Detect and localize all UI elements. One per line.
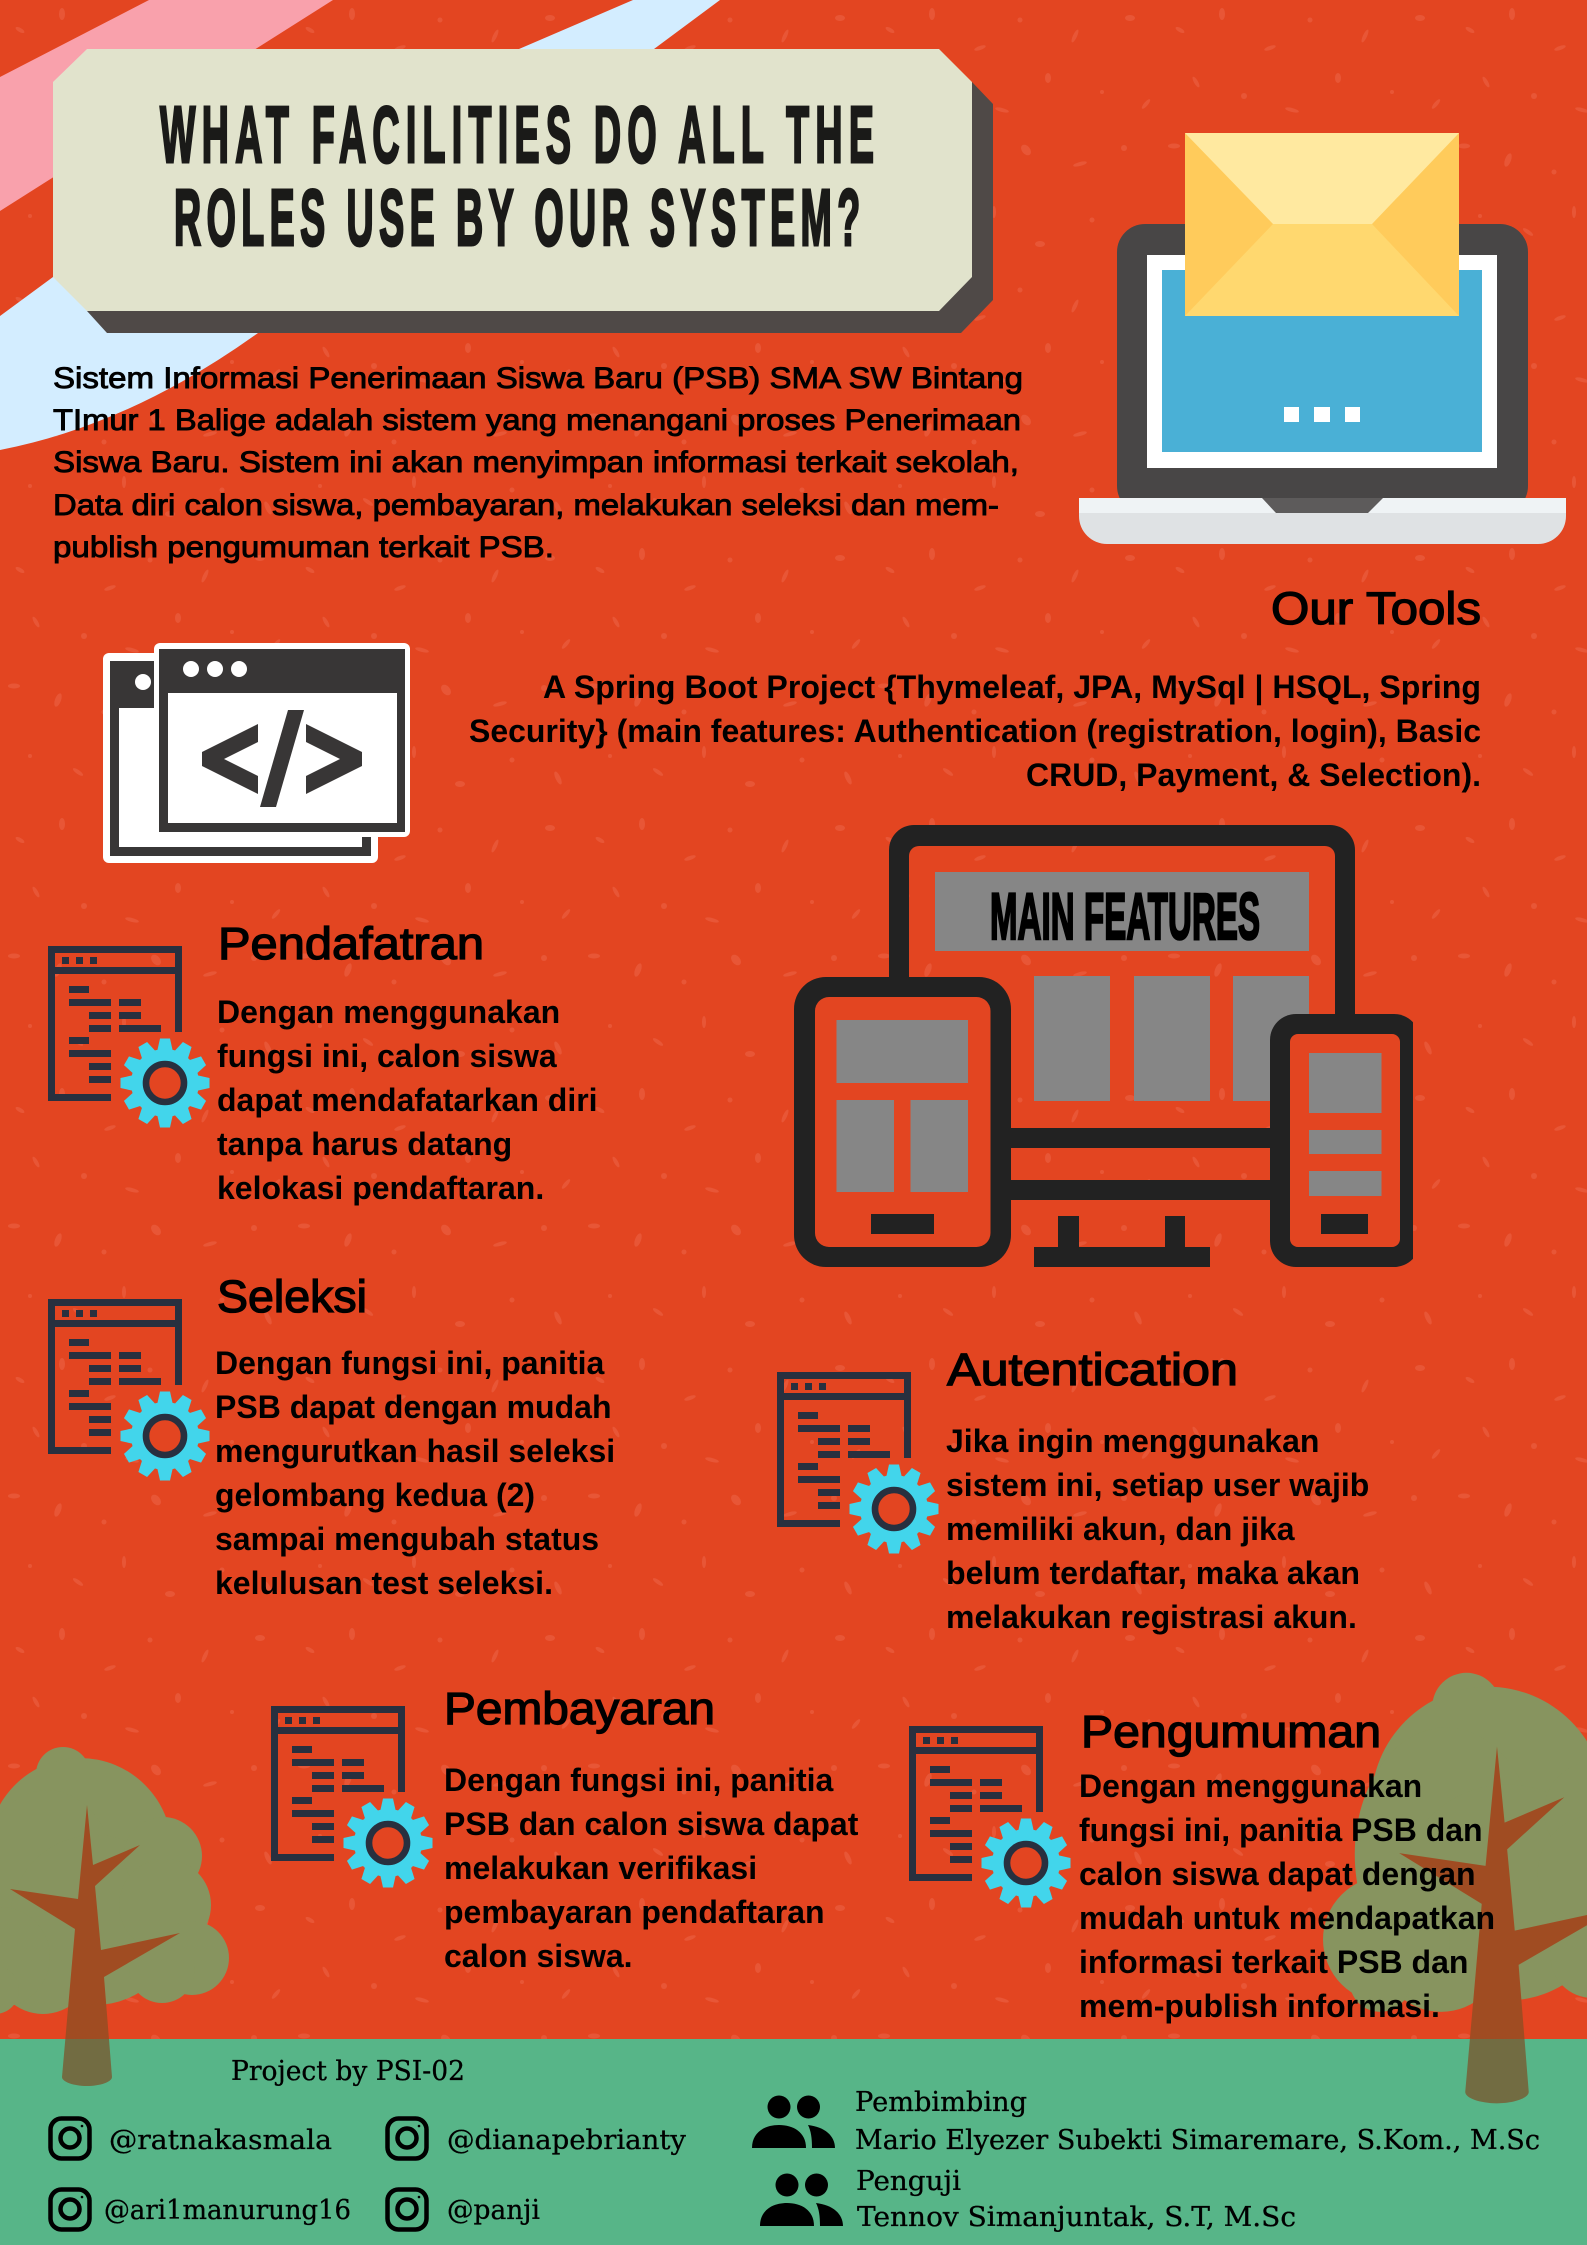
body: tanpa harus datang (217, 1126, 512, 1162)
body: kelulusan test seleksi. (215, 1565, 553, 1601)
name (855, 2087, 1540, 2156)
title text: WHAT FACILITIES DO ALL THE (160, 90, 874, 180)
body: fungsi ini, calon siswa (217, 1038, 557, 1074)
body: memiliki akun, dan jika (946, 1511, 1295, 1547)
intro paragraph: Data diri calon siswa, pembayaran, melakukan seleksi dan mem- (53, 489, 999, 522)
icon: main features devices (794, 825, 1420, 1267)
body (217, 994, 598, 1206)
body: sampai mengubah status (215, 1521, 599, 1557)
icon: code gear (48, 1299, 210, 1480)
body: informasi terkait PSB dan (1079, 1944, 1468, 1980)
feature: pembayaran (271, 1683, 859, 1974)
body: sistem ini, setiap user wajib (946, 1467, 1369, 1503)
body: Dengan menggunakan (1079, 1768, 1422, 1804)
monitor (889, 825, 1355, 1267)
penguji credit (760, 2166, 1296, 2233)
icon: laptop with envelope (1079, 133, 1566, 544)
tools paragraph: A Spring Boot Project {Thymeleaf, JPA, MySql | HSQL, Spring (543, 669, 1481, 705)
body: gelombang kedua (2) (215, 1477, 535, 1513)
icon: code gear (777, 1372, 938, 1554)
intro paragraph: publish pengumuman terkait PSB. (53, 531, 554, 564)
intro paragraph: Siswa Baru. Sistem ini akan menyimpan informasi terkait sekolah, (53, 446, 1019, 479)
intro paragraph: Sistem Informasi Penerimaan Siswa Baru (PSB) SMA SW Bintang (53, 362, 1023, 395)
body: belum terdaftar, maka akan (946, 1555, 1360, 1591)
instagram: ratnakasmala (50, 2118, 332, 2158)
icon: code windows (103, 643, 410, 863)
name (856, 2166, 1296, 2233)
body: fungsi ini, panitia PSB dan (1079, 1812, 1483, 1848)
icon: people (752, 2096, 835, 2148)
body: calon siswa dapat dengan (1079, 1856, 1476, 1892)
feature: seleksi (48, 1271, 615, 1601)
body: pembayaran pendaftaran (444, 1894, 825, 1930)
title plate (53, 49, 993, 333)
body: kelokasi pendaftaran. (217, 1170, 544, 1206)
tools paragraph (469, 669, 1481, 793)
instagram: dianapebrianty: @dianapebrianty (447, 2125, 687, 2156)
body: Dengan menggunakan (217, 994, 560, 1030)
body: PSB dan calon siswa dapat (444, 1806, 859, 1842)
body: Dengan fungsi ini, panitia (215, 1345, 605, 1381)
tree: right (1323, 1673, 1587, 2103)
heading: Pendafatran (218, 918, 484, 969)
instagram: dianapebrianty (388, 2118, 687, 2158)
body: PSB dapat dengan mudah (215, 1389, 611, 1425)
project credit: Project by PSI-02 (231, 2056, 465, 2087)
heading: Autentication (947, 1344, 1238, 1395)
name: Pembimbing (855, 2087, 1027, 2118)
body: Jika ingin menggunakan (946, 1423, 1319, 1459)
body (444, 1762, 859, 1974)
body (215, 1345, 615, 1601)
instagram: ari1manurung16 (50, 2190, 351, 2230)
pink diagonal stripe (0, 0, 333, 211)
icon: code gear (48, 946, 210, 1128)
title text: ROLES USE BY OUR SYSTEM? (174, 173, 860, 263)
tools paragraph: CRUD, Payment, & Selection). (1026, 757, 1481, 793)
body: melakukan registrasi akun. (946, 1599, 1357, 1635)
name: Tennov Simanjuntak, S.T, M.Sc (857, 2202, 1296, 2233)
body: mem-publish informasi. (1079, 1988, 1440, 2024)
feature: autentication (777, 1344, 1369, 1635)
body: dapat mendafatarkan diri (217, 1082, 598, 1118)
pembimbing credit (752, 2087, 1540, 2156)
feature: pengumuman (909, 1706, 1495, 2024)
body (1079, 1768, 1495, 2024)
plate face (53, 49, 972, 311)
intro paragraph: TImur 1 Balige adalah sistem yang menangani proses Penerimaan (53, 404, 1021, 437)
plate shadow (87, 82, 993, 333)
tree trunk bases over footer (62, 2039, 1529, 2225)
tablet (794, 977, 1011, 1267)
feature: pendafatran (48, 918, 598, 1206)
tree: left (0, 1747, 229, 2086)
tools paragraph: Security} (main features: Authentication (registration, login), Basic (469, 713, 1481, 749)
body: calon siswa. (444, 1938, 633, 1974)
heading: Pembayaran (444, 1683, 715, 1734)
footer band (0, 2039, 1587, 2245)
instagram: ratnakasmala: @ratnakasmala (109, 2125, 332, 2156)
body: melakukan verifikasi (444, 1850, 757, 1886)
instagram: panji: @panji (447, 2195, 540, 2226)
label: main features: MAIN FEATURES (990, 881, 1260, 954)
intro paragraph (53, 362, 1023, 564)
icon: people (760, 2174, 843, 2226)
name: Penguji (856, 2166, 961, 2197)
icon: code gear (271, 1706, 432, 1888)
title text (160, 90, 874, 263)
body: mengurutkan hasil seleksi (215, 1433, 615, 1469)
name: Mario Elyezer Subekti Simaremare, S.Kom., M.Sc (855, 2125, 1540, 2156)
phone (1270, 1014, 1420, 1267)
instagram: ari1manurung16: @ari1manurung16 (104, 2195, 351, 2226)
instagram: panji (388, 2190, 540, 2230)
heading: Pengumuman (1081, 1706, 1381, 1757)
body (946, 1423, 1369, 1635)
heading: Seleksi (217, 1271, 367, 1322)
body: Dengan fungsi ini, panitia (444, 1762, 834, 1798)
light blue diagonal stripe (0, 0, 720, 450)
heading: our tools: Our Tools (1271, 583, 1481, 634)
icon: code gear (909, 1726, 1070, 1908)
body: mudah untuk mendapatkan (1079, 1900, 1495, 1936)
